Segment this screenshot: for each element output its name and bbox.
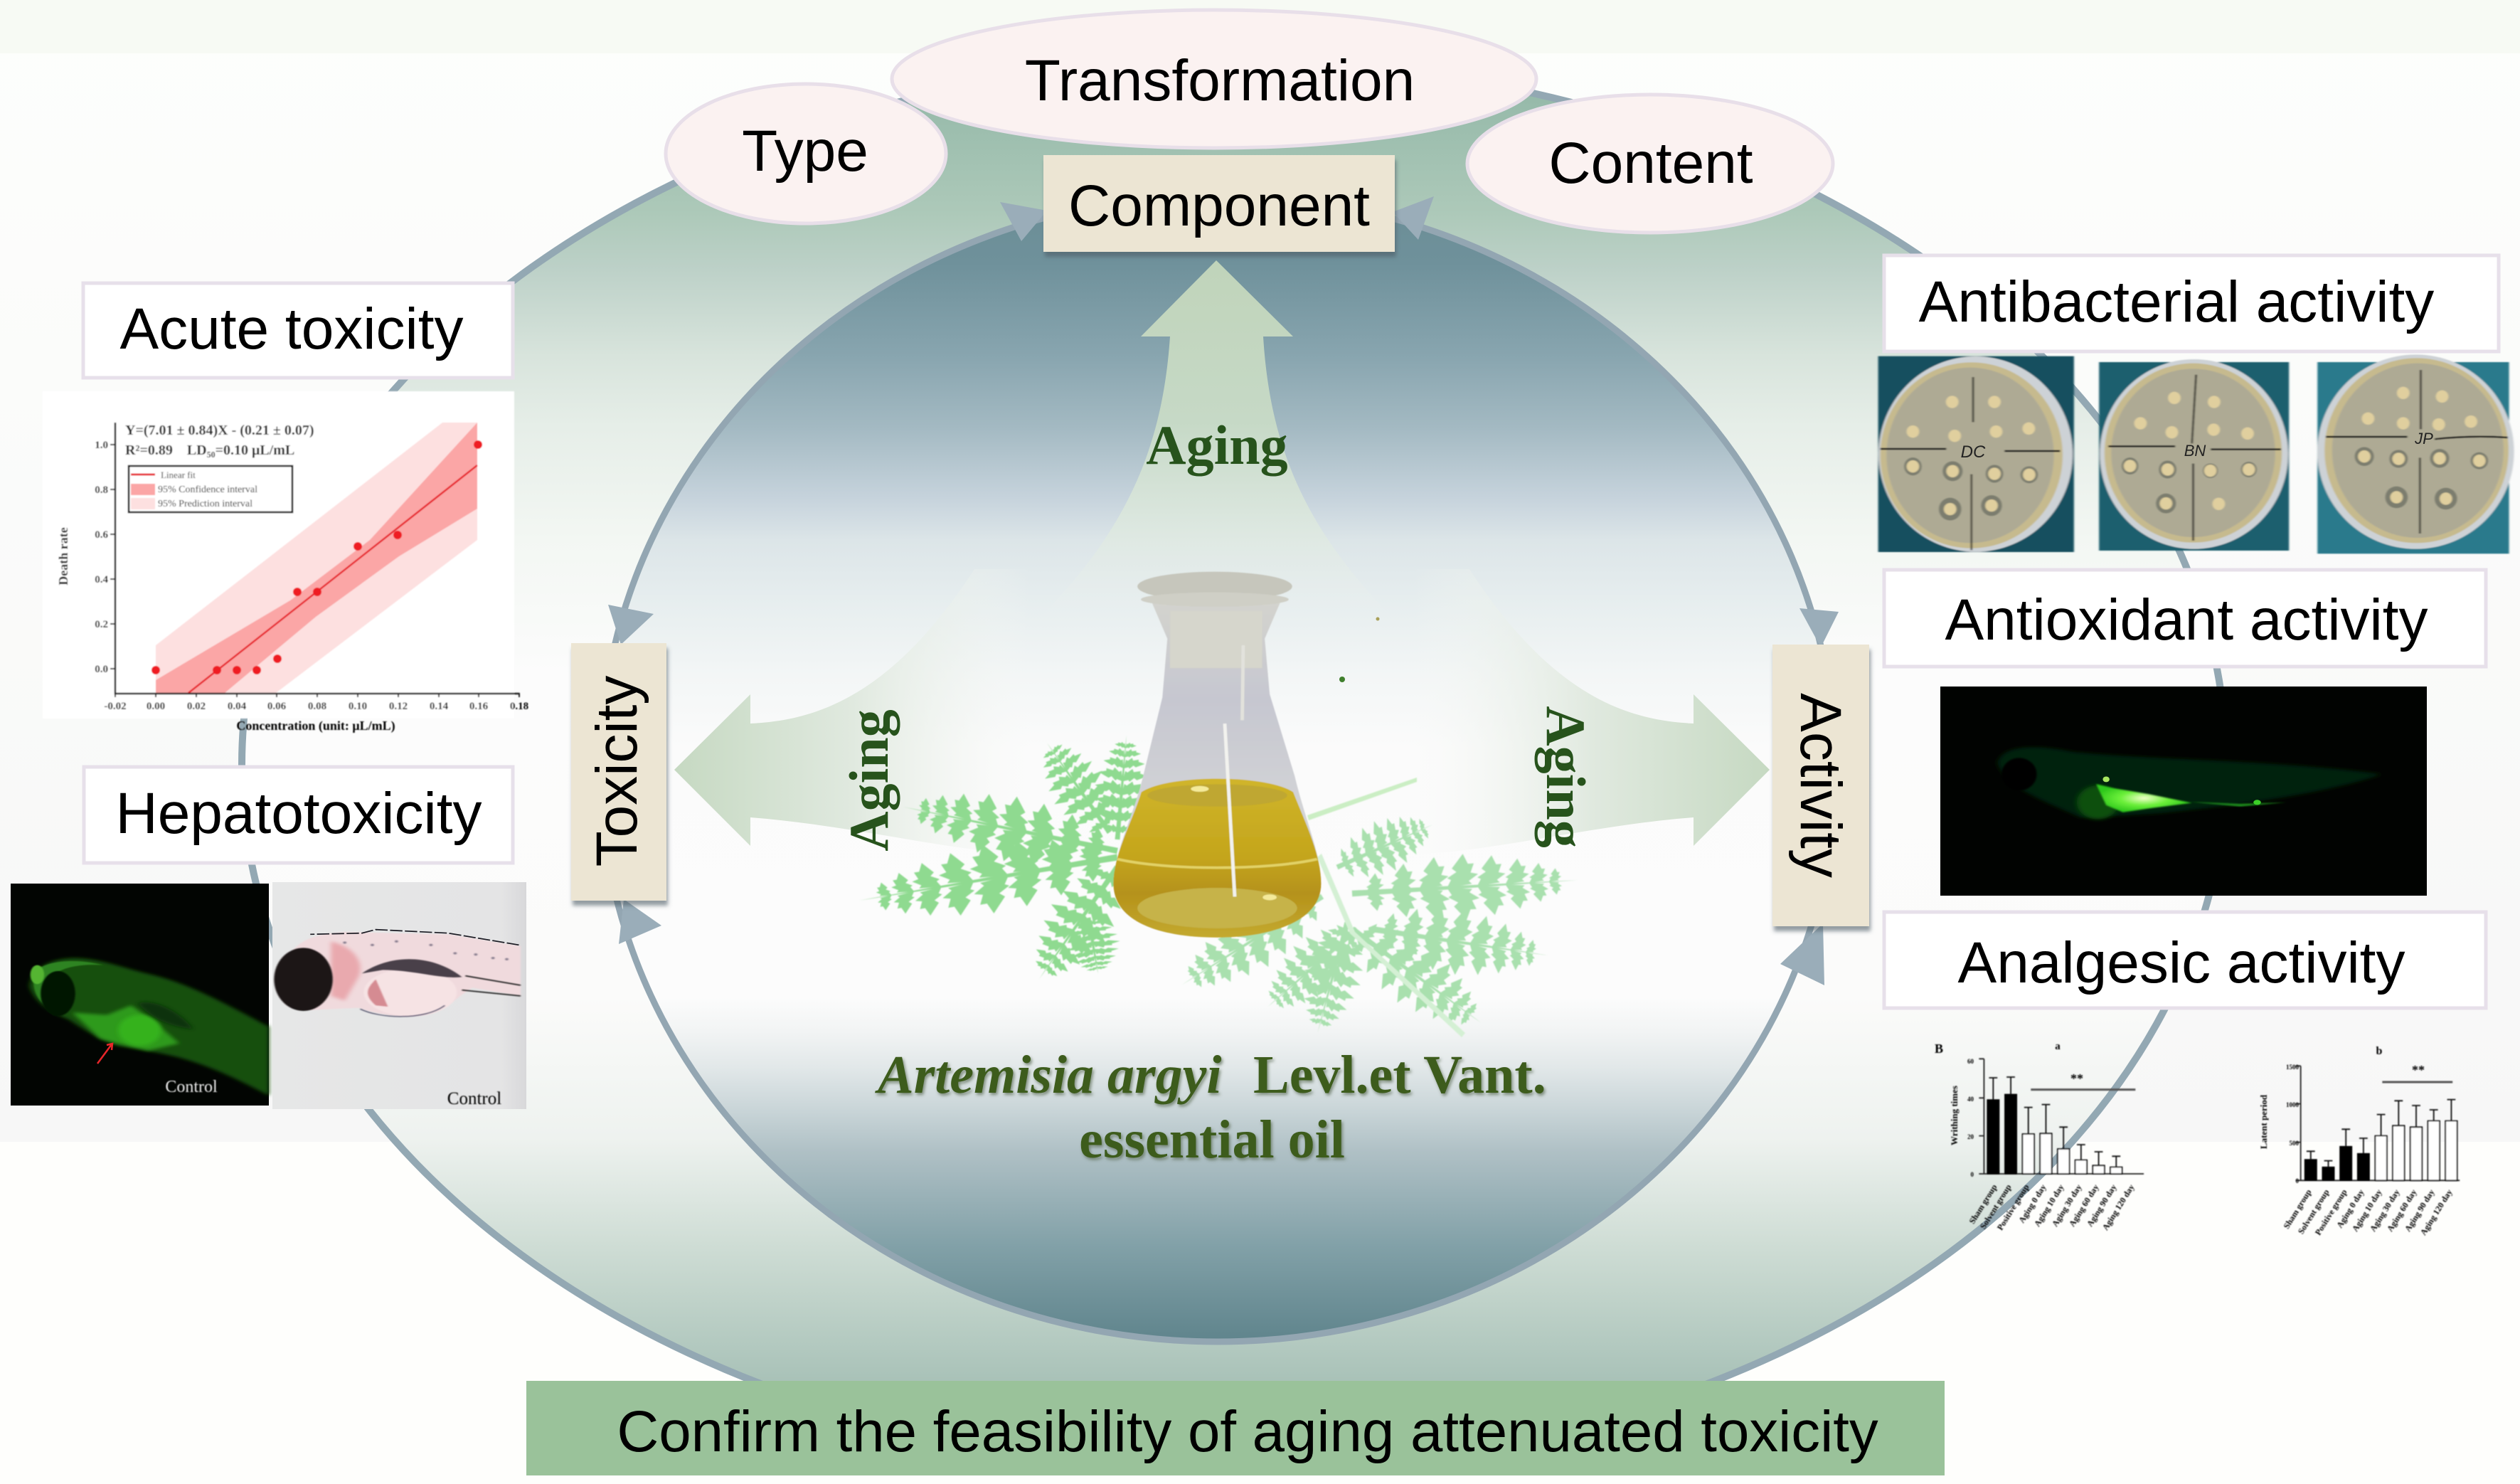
chart: death rate versus concentration: 0.0 [95, 664, 108, 675]
chart: latent period bar chart: 500 [2289, 1140, 2299, 1147]
label: Aging right: Aging [1535, 706, 1597, 848]
chart: latent period bar chart: Positive group [2313, 1187, 2349, 1237]
chart: latent period bar chart: Aging 120 day [2418, 1187, 2455, 1237]
chart: writhing times bar chart [1935, 1041, 2144, 1232]
chart: death rate versus concentration: -0.02 [104, 701, 127, 712]
box: Toxicity [571, 643, 666, 901]
box: Antibacterial activity: Antibacterial activity [1919, 270, 2434, 334]
chart: latent period bar chart: Solvent group [2296, 1187, 2332, 1236]
arrowheads on inner ring [608, 196, 1839, 985]
box: Activity: Activity [1788, 693, 1853, 878]
ellipse: Type [666, 84, 946, 223]
box: Component [1043, 155, 1395, 252]
chart: death rate versus concentration: 0.16 [469, 701, 489, 712]
confidence interval [156, 423, 477, 693]
ellipse: Content [1467, 95, 1833, 233]
chart: latent period bar chart [2258, 1045, 2460, 1237]
arrow: aging left to toxicity [674, 569, 1031, 854]
photo: antibacterial plates: JP [2414, 430, 2433, 447]
chart: writhing times bar chart: a [2055, 1041, 2061, 1052]
box: Component: Component [1068, 174, 1370, 238]
chart: death rate versus concentration: 0.06 [267, 701, 287, 712]
chart: writhing times bar chart: Aging 0 day [2016, 1182, 2048, 1225]
box: Antibacterial activity [1884, 255, 2499, 351]
conclusion banner: Confirm the feasibility of aging attenuated toxicity [617, 1399, 1878, 1464]
box: Hepatotoxicity [84, 767, 513, 863]
box: Antioxidant activity [1884, 570, 2486, 667]
box: Activity [1772, 645, 1869, 926]
ellipse: Content: Content [1548, 131, 1753, 196]
outer circle ring [242, 60, 2226, 1469]
ellipse: Type: Type [742, 119, 868, 184]
box: Toxicity: Toxicity [585, 676, 649, 866]
species title: Artemisia argyi [875, 1045, 1221, 1105]
linear fit [188, 465, 477, 693]
chart: latent period bar chart: Sham group [2281, 1187, 2314, 1231]
chart: latent period bar chart: Aging 90 day [2403, 1187, 2437, 1234]
arrow: aging up to component [1038, 260, 1394, 619]
chart: death rate versus concentration: R²=0.89 LD₅₀=0.10 μL/mL [125, 442, 294, 458]
chart: writhing times bar chart: 20 [1967, 1133, 1974, 1140]
photo: antibacterial plates: BN [2184, 442, 2206, 460]
chart: latent period bar chart: Aging 0 day [2334, 1187, 2366, 1230]
data points [151, 440, 482, 674]
arrow: aging right to activity [1413, 569, 1770, 854]
chart: writhing times bar chart: Solvent group [1978, 1182, 2014, 1231]
chart: writhing times bar chart: Writhing times [1949, 1086, 1960, 1145]
species title: Levl.et Vant. [1253, 1045, 1546, 1105]
chart: death rate versus concentration: 0.8 [95, 484, 108, 496]
chart: death rate versus concentration: 0.18 [510, 701, 528, 712]
plate BN [2099, 359, 2289, 551]
chart legend: Linear fit [161, 470, 196, 480]
chart: writhing times bar chart: 40 [1967, 1096, 1974, 1103]
chart: death rate versus concentration: 0.12 [389, 701, 408, 712]
chart: death rate versus concentration: 0.08 [308, 701, 326, 712]
chart: death rate versus concentration [43, 391, 528, 733]
plate DC [1878, 356, 2074, 552]
chart: latent period bar chart: Latent period [2258, 1094, 2269, 1149]
photo: antioxidant fluorescent zebrafish [1940, 687, 2427, 896]
chart: latent period bar chart: Aging 10 day [2350, 1187, 2384, 1234]
chart: writhing times bar chart: Positive group [1995, 1182, 2031, 1232]
chart: death rate versus concentration: 0.14 [430, 701, 449, 712]
chart: death rate versus concentration: 0.6 [95, 529, 108, 541]
chart: latent period bar chart: b [2376, 1045, 2383, 1057]
photo: zebrafish larva brightfield: Control [447, 1089, 501, 1108]
chart: death rate versus concentration: 0.2 [95, 619, 108, 630]
chart: latent period bar chart: Aging 60 day [2385, 1187, 2419, 1234]
chart: death rate versus concentration: Death rate [56, 527, 70, 585]
prediction interval [156, 423, 477, 693]
box: Hepatotoxicity: Hepatotoxicity [115, 781, 482, 846]
ellipse: Transformation [892, 10, 1536, 148]
conclusion banner [526, 1381, 1945, 1475]
chart: writhing times bar chart: ** [2070, 1071, 2083, 1086]
ellipse: Transformation: Transformation [1025, 48, 1415, 113]
box: Acute toxicity: Acute toxicity [119, 297, 464, 361]
photo: green fluorescent zebrafish [11, 884, 269, 1106]
illustration: flask of essential oil [1113, 572, 1321, 938]
chart: writhing times bar chart: Aging 30 day [2050, 1182, 2084, 1229]
box: Analgesic activity: Analgesic activity [1958, 931, 2405, 995]
chart: latent period bar chart: ** [2412, 1063, 2425, 1077]
chart: death rate versus concentration: 1.0 [95, 440, 108, 451]
red arrow [97, 1044, 112, 1064]
chart: death rate versus concentration: 0.02 [187, 701, 206, 712]
chart: writhing times bar chart: Sham group [1967, 1182, 1999, 1226]
axes [115, 423, 519, 694]
chart: writhing times bar chart: Aging 120 day [2100, 1182, 2137, 1232]
chart legend: 95% Confidence interval [158, 484, 257, 495]
box: Antioxidant activity: Antioxidant activity [1945, 588, 2428, 652]
chart: death rate versus concentration: Y=(7.01 ± 0.84)X - (0.21 ± 0.07) [125, 423, 314, 438]
photo: antibacterial plates [1878, 354, 2514, 553]
chart: death rate versus concentration: 0.4 [95, 574, 108, 585]
inner circle ring [600, 195, 1835, 1342]
chart: latent period bar chart: Aging 30 day [2368, 1187, 2402, 1234]
box: Acute toxicity [83, 283, 513, 378]
chart: writhing times bar chart: 0 [1970, 1171, 1974, 1178]
icon: stray leaf specks [1339, 618, 1380, 682]
chart: writhing times bar chart: Aging 60 day [2067, 1182, 2101, 1229]
chart: writhing times bar chart: B [1935, 1042, 1943, 1056]
chart: latent period bar chart: 0 [2296, 1177, 2299, 1184]
chart: writhing times bar chart: 60 [1967, 1058, 1974, 1065]
chart: death rate versus concentration: 0.10 [349, 701, 367, 712]
photo: antibacterial plates: DC [1961, 442, 1986, 462]
chart legend: 95% Prediction interval [158, 499, 252, 509]
chart: latent period bar chart: 1000 [2286, 1101, 2299, 1108]
plate JP [2317, 354, 2514, 553]
illustration: artemisia leaves [854, 726, 1579, 1049]
photo: green fluorescent zebrafish: Control [165, 1078, 218, 1096]
chart: writhing times bar chart: Aging 10 day [2032, 1182, 2066, 1229]
chart: death rate versus concentration: 0.04 [228, 701, 247, 712]
box: Analgesic activity [1884, 912, 2486, 1008]
chart: latent period bar chart: 1500 [2286, 1064, 2299, 1071]
chart legend [129, 466, 292, 512]
species title: essential oil [1079, 1110, 1345, 1170]
chart: death rate versus concentration: 0.00 [147, 701, 165, 712]
chart: writhing times bar chart: Aging 90 day [2085, 1182, 2119, 1229]
chart: death rate versus concentration: Concentration (unit: μL/mL) [236, 719, 395, 733]
species title [875, 1045, 1546, 1170]
photo: zebrafish larva brightfield [272, 882, 526, 1109]
label: Aging left: Aging [838, 709, 900, 852]
label: Aging up: Aging [1146, 414, 1288, 476]
